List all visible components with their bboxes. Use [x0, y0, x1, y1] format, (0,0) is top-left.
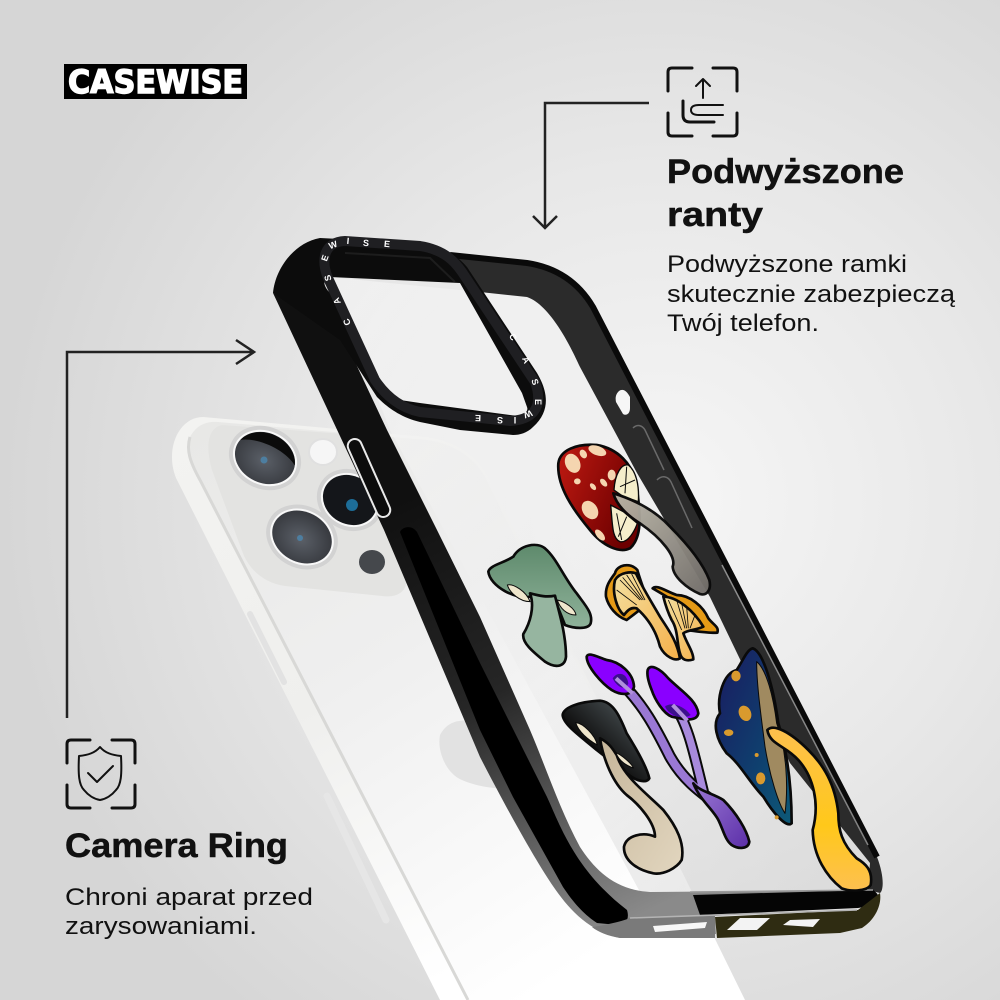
- text: camera ring description: zarysowaniami.: [65, 913, 257, 940]
- clear case interior: [330, 277, 875, 892]
- logo: CASEWISE: [68, 63, 243, 101]
- mushroom: purple: [587, 655, 749, 848]
- ring lettering: E: [384, 239, 390, 249]
- heading: raised edges: [667, 153, 904, 234]
- ring lettering: W: [522, 408, 534, 420]
- camera ring: [273, 236, 546, 435]
- left band: [273, 293, 873, 938]
- lens right: [308, 460, 392, 540]
- heading: raised edges: Podwyższone: [667, 153, 904, 191]
- heading: camera ring: Camera Ring: [65, 827, 288, 865]
- ring lettering: A: [520, 355, 532, 366]
- text: raised edges description: Podwyższone ramki: [667, 251, 907, 278]
- white phone: [172, 417, 745, 1000]
- side buttons: [633, 426, 692, 528]
- ring lettering: [319, 236, 543, 425]
- ring lettering: S: [529, 378, 541, 386]
- mushroom: green: [488, 545, 591, 666]
- text: camera ring description: [65, 884, 313, 940]
- ring lettering: I: [346, 236, 350, 246]
- ring lettering: C: [507, 332, 519, 343]
- mushroom: galaxy: [716, 648, 871, 891]
- mushroom: black: [563, 701, 682, 874]
- mushrooms illustration: [488, 443, 871, 891]
- ring lettering: S: [322, 274, 334, 282]
- ring lettering: S: [363, 238, 369, 248]
- ring lettering: C: [341, 317, 353, 327]
- arrow: top feature: [533, 103, 649, 228]
- camera plateau: [208, 425, 407, 596]
- text: raised edges description: Twój telefon.: [667, 310, 819, 337]
- black slot: [400, 527, 628, 925]
- icon: raised edges: [668, 68, 737, 136]
- mushroom: chanterelles: [606, 565, 718, 660]
- ring lettering: W: [327, 239, 339, 251]
- bottom face and ports: [715, 893, 880, 938]
- bottom black band: [693, 890, 879, 915]
- text: raised edges description: [667, 251, 956, 337]
- lens bottom: [257, 495, 347, 579]
- mushroom: red: [558, 443, 710, 594]
- ring lettering: S: [497, 415, 503, 425]
- ring lettering: E: [475, 413, 481, 423]
- volume button: [346, 437, 392, 519]
- ring lettering: E: [533, 399, 543, 405]
- right band: [450, 255, 883, 893]
- icon: shield: [67, 740, 135, 808]
- case frame: [273, 255, 883, 938]
- heading: raised edges: ranty: [667, 196, 763, 234]
- mute switch hole: [616, 390, 630, 415]
- ring face: [324, 241, 538, 421]
- apple logo: [439, 721, 512, 788]
- text: camera ring description: Chroni aparat przed: [65, 884, 313, 911]
- flash and sensor: [309, 439, 337, 465]
- arrow: left feature: [67, 340, 254, 718]
- lens top: [221, 417, 309, 499]
- ring lettering: E: [319, 253, 331, 263]
- ring lettering: I: [514, 415, 516, 425]
- text: raised edges description: skutecznie zabezpieczą: [667, 281, 956, 308]
- ring lettering: A: [331, 296, 343, 306]
